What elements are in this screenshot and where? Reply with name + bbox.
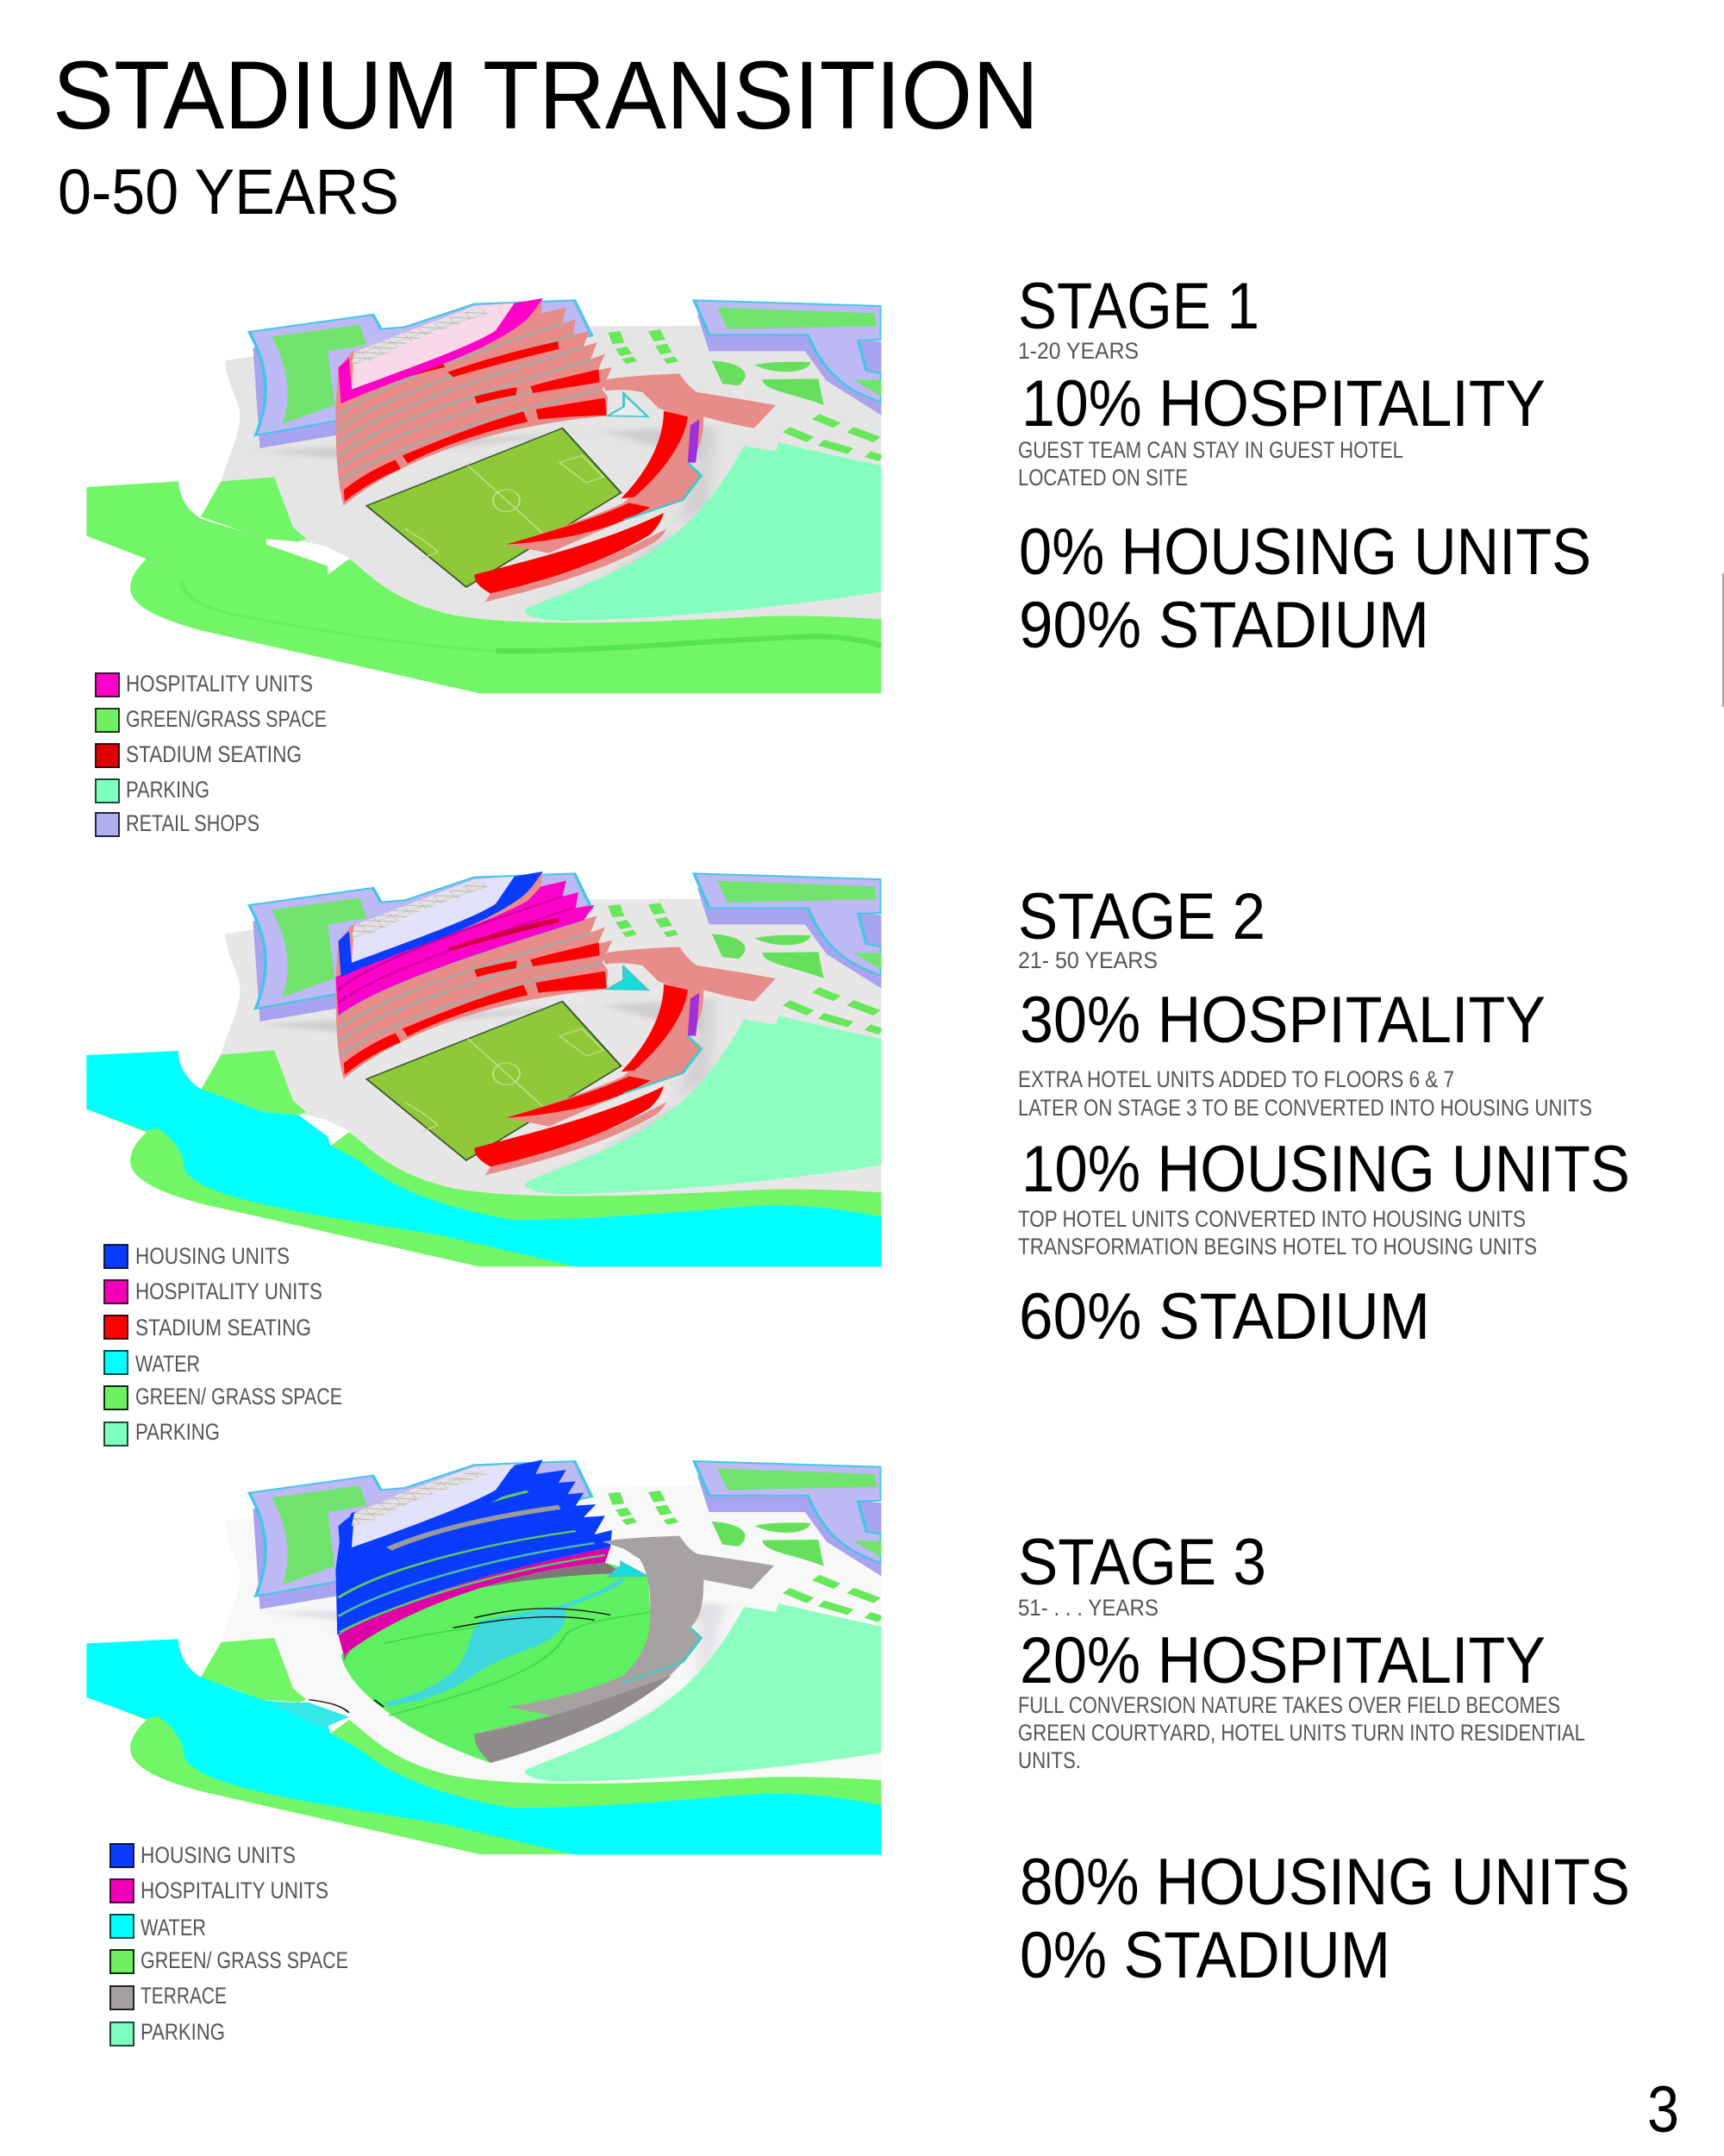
water bbox=[86, 1051, 881, 1266]
subtitle: 0-50 YEARS bbox=[58, 156, 399, 228]
stage 3 text: FULL CONVERSION NATURE TAKES OVER FIELD BECOMES bbox=[1018, 1692, 1560, 1718]
stage 1 text: 0% HOUSING UNITS bbox=[1019, 516, 1591, 589]
legend stage 1: STADIUM SEATING bbox=[126, 741, 302, 767]
site plate bbox=[221, 325, 881, 635]
retail shops bbox=[249, 300, 881, 448]
green space bbox=[86, 1050, 881, 1266]
stage 2 text bbox=[1018, 880, 1630, 1353]
legend stage 3: GREEN/ GRASS SPACE bbox=[141, 1947, 348, 1973]
legend stage 2: WATER bbox=[135, 1351, 200, 1377]
stream bbox=[384, 1578, 624, 1706]
hospitality floors bbox=[335, 881, 595, 1016]
stage 3 text bbox=[1018, 1526, 1630, 1992]
site plate bbox=[221, 898, 881, 1209]
stage 2 text: TRANSFORMATION BEGINS HOTEL TO HOUSING UNITS bbox=[1018, 1234, 1537, 1259]
stage 1 text: 1-20 YEARS bbox=[1018, 338, 1139, 364]
stage 3 text: GREEN COURTYARD, HOTEL UNITS TURN INTO RESIDENTIAL bbox=[1018, 1720, 1585, 1746]
stage 3 text: STAGE 3 bbox=[1018, 1526, 1266, 1599]
stage 2 text: LATER ON STAGE 3 TO BE CONVERTED INTO HOUSING UNITS bbox=[1018, 1095, 1592, 1121]
legend stage 1: PARKING bbox=[126, 777, 209, 803]
parking bbox=[525, 442, 881, 621]
stadium tower bbox=[335, 1459, 624, 1662]
legend stage 3: HOUSING UNITS bbox=[141, 1842, 296, 1868]
shadow bbox=[274, 998, 717, 1147]
stage 2 text: EXTRA HOTEL UNITS ADDED TO FLOORS 6 & 7 bbox=[1018, 1066, 1454, 1092]
stadium seating ring bbox=[474, 947, 776, 1175]
stadium tower bbox=[335, 298, 612, 506]
legend stage 2: STADIUM SEATING bbox=[135, 1315, 311, 1340]
legend stage 3 bbox=[110, 1842, 348, 2046]
legend stage 1 bbox=[96, 671, 327, 836]
legend stage 2: GREEN/ GRASS SPACE bbox=[135, 1384, 342, 1409]
legend stage 1: RETAIL SHOPS bbox=[126, 810, 259, 836]
courtyard paths bbox=[384, 1612, 650, 1715]
green dashes and beds bbox=[614, 330, 881, 459]
football field bbox=[366, 428, 621, 587]
stage 2 text: 60% STADIUM bbox=[1019, 1280, 1430, 1353]
green space bbox=[86, 1638, 881, 1854]
stage 1 text: GUEST TEAM CAN STAY IN GUEST HOTEL bbox=[1018, 437, 1403, 463]
legend stage 2: HOSPITALITY UNITS bbox=[135, 1278, 322, 1304]
title: STADIUM TRANSITION bbox=[53, 41, 1039, 149]
stage 1 text: 10% HOSPITALITY bbox=[1021, 367, 1546, 441]
pool bbox=[608, 1562, 647, 1577]
stadium seating ring bbox=[474, 373, 776, 602]
site plate bbox=[221, 1485, 881, 1796]
legend stage 3: WATER bbox=[141, 1915, 206, 1940]
legend stage 2 bbox=[104, 1243, 342, 1446]
stage 1 text: LOCATED ON SITE bbox=[1018, 465, 1188, 491]
stage 2 diagram bbox=[86, 872, 881, 1266]
housing roof band bbox=[338, 872, 542, 977]
courtyard bbox=[341, 1563, 656, 1763]
small pool bbox=[608, 967, 647, 990]
shadow bbox=[278, 1603, 728, 1729]
legend stage 3: TERRACE bbox=[141, 1983, 227, 2009]
stage 2 text: 21- 50 YEARS bbox=[1018, 947, 1158, 973]
legend stage 1: HOSPITALITY UNITS bbox=[126, 671, 313, 697]
legend stage 2: PARKING bbox=[135, 1419, 220, 1445]
green dashes and beds bbox=[614, 903, 881, 1032]
page number: 3 bbox=[1647, 2073, 1679, 2147]
stage 3 text: UNITS. bbox=[1018, 1747, 1081, 1773]
green dashes and beds bbox=[614, 1491, 881, 1619]
retail shops bbox=[249, 1461, 881, 1609]
shadow bbox=[274, 425, 717, 574]
small court bbox=[608, 394, 647, 416]
terrace ring bbox=[474, 1536, 774, 1763]
retail shops bbox=[249, 873, 881, 1022]
legend stage 2: HOUSING UNITS bbox=[135, 1243, 290, 1269]
parking bbox=[525, 1016, 881, 1194]
legend stage 3: HOSPITALITY UNITS bbox=[141, 1878, 328, 1903]
legend stage 3: PARKING bbox=[141, 2019, 225, 2045]
stage 2 text: TOP HOTEL UNITS CONVERTED INTO HOUSING UNITS bbox=[1018, 1206, 1526, 1232]
stage 1 text: 90% STADIUM bbox=[1019, 589, 1429, 662]
turquoise inlet bbox=[271, 1703, 349, 1728]
stage 3 text: 20% HOSPITALITY bbox=[1020, 1624, 1546, 1697]
stage 2 text: STAGE 2 bbox=[1018, 880, 1265, 953]
stage 2 text: 10% HOUSING UNITS bbox=[1021, 1133, 1630, 1206]
green space bbox=[86, 477, 881, 693]
football field bbox=[366, 1002, 621, 1160]
stage 3 text: 51- . . . YEARS bbox=[1018, 1595, 1159, 1621]
parking bbox=[525, 1603, 881, 1782]
stadium tower bbox=[335, 872, 612, 1079]
bridges bbox=[309, 1609, 610, 1713]
stage 1 text: STAGE 1 bbox=[1018, 270, 1259, 343]
stage 2 text: 30% HOSPITALITY bbox=[1020, 984, 1546, 1057]
stage 1 diagram bbox=[86, 298, 881, 693]
legend stage 1: GREEN/GRASS SPACE bbox=[126, 706, 327, 732]
stage 3 diagram bbox=[86, 1459, 881, 1855]
water bbox=[86, 1639, 881, 1855]
stage 3 text: 0% STADIUM bbox=[1020, 1919, 1390, 1992]
stage 1 text bbox=[1018, 270, 1591, 662]
stage 3 text: 80% HOUSING UNITS bbox=[1020, 1846, 1630, 1919]
